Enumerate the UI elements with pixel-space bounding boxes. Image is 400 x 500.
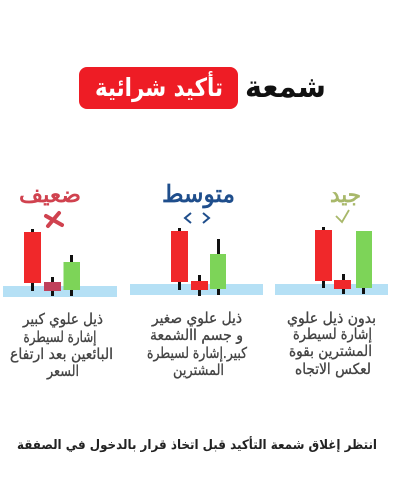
icon: check mark (336, 210, 349, 222)
label: weak: ضعيف (19, 183, 81, 208)
candle: small red (44, 277, 61, 296)
base strip (130, 284, 263, 295)
candle: tall red (24, 229, 41, 291)
description: weak: البائعين بعد ارتفاع (10, 345, 113, 363)
description: good (287, 309, 376, 378)
panel: medium (130, 180, 263, 379)
title badge (79, 67, 238, 109)
description: good: بدون ذيل علوي (287, 309, 376, 328)
description: medium: ذيل علوي صغير (151, 309, 242, 328)
description: weak: إشارة لسيطرة (24, 328, 96, 346)
description: medium: كبير.إشارة لسيطرة (147, 344, 248, 362)
description: good: لعكس الاتجاه (295, 360, 371, 378)
description: weak (10, 310, 113, 380)
footer note: انتظر إغلاق شمعة التأكيد قبل اتخاذ قرار بالدخول في الصفقة (17, 436, 377, 453)
candle: green (356, 231, 372, 294)
description: medium: و جسم االشمعة (150, 326, 243, 344)
candle: small red (334, 274, 351, 294)
label: good: جيد (330, 183, 361, 208)
description: weak: السعر (46, 362, 79, 380)
title word: candle: شمعة (245, 70, 326, 105)
description: medium (147, 309, 248, 379)
icon: angle brackets (185, 213, 209, 223)
panel: weak (3, 183, 117, 380)
icon: cross (46, 213, 62, 226)
description: good: المشترين بقوة (289, 342, 372, 360)
candle: green (210, 239, 226, 295)
candle: tall red (171, 228, 188, 290)
description: weak: ذيل علوي كبير (22, 310, 103, 329)
candle: small red (191, 275, 208, 296)
title (79, 67, 326, 109)
label: medium: متوسط (162, 180, 235, 208)
candle: tall red (315, 227, 332, 288)
panel: good (275, 183, 388, 378)
description: medium: المشترين (173, 361, 224, 379)
description: good: إشارة لسيطرة (293, 325, 372, 343)
title badge: تأكيد شرائية (95, 71, 223, 103)
candle: green (64, 255, 80, 296)
base strip (275, 284, 388, 295)
base strip (3, 286, 117, 297)
